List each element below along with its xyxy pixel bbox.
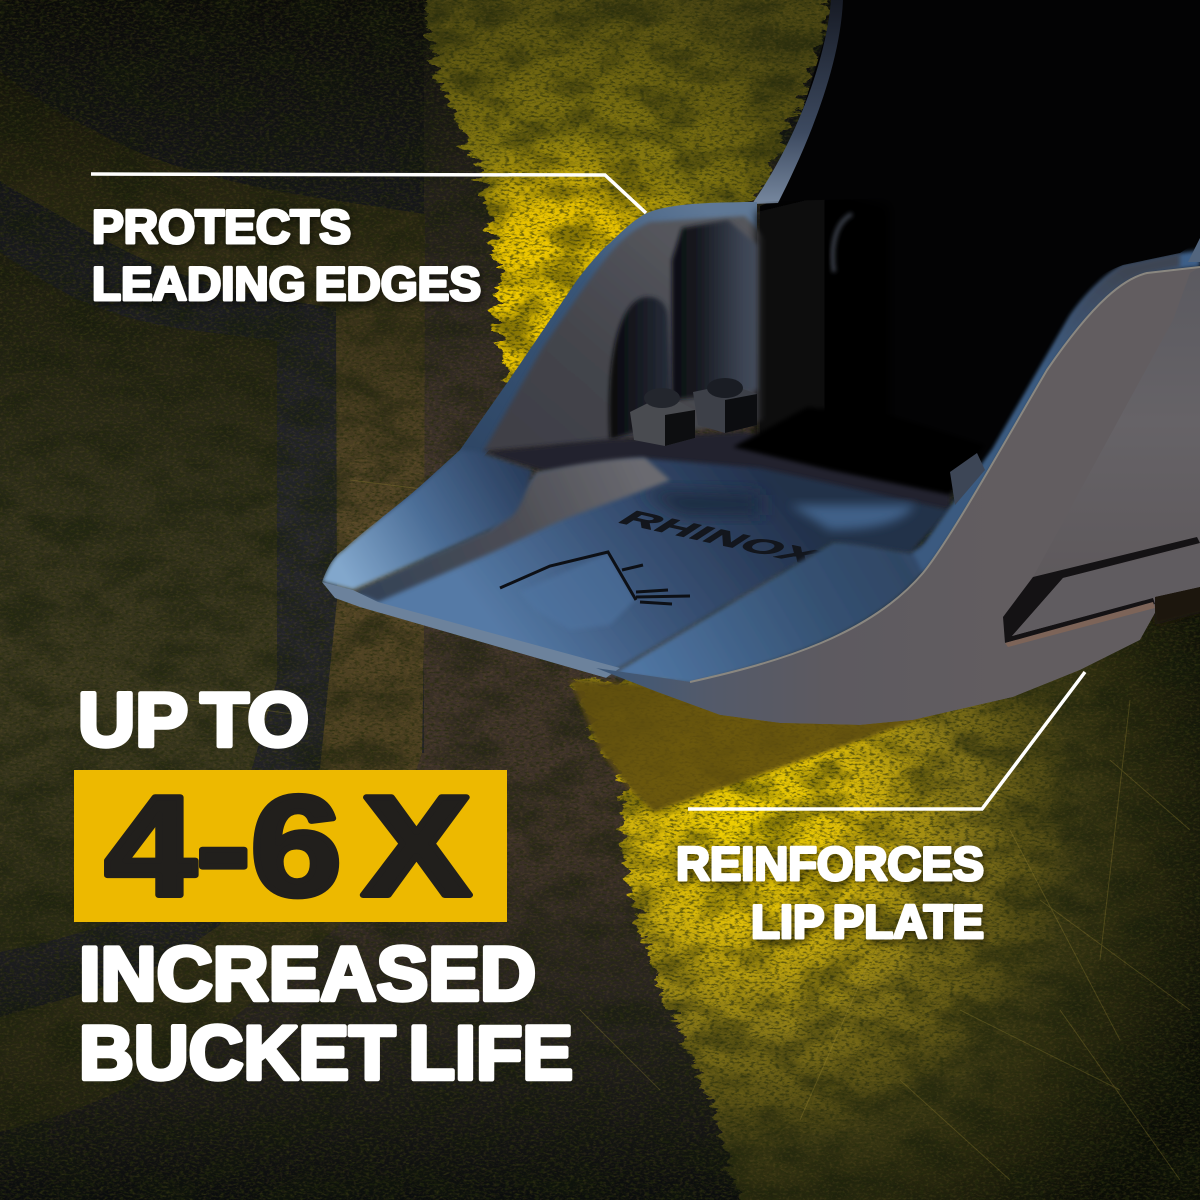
- embossed logo mark: [500, 552, 690, 604]
- grey body right panel: [1033, 267, 1200, 578]
- logo facet: [538, 554, 634, 627]
- body seam highlight: [690, 267, 1200, 682]
- upper wing leading edge: [322, 202, 757, 582]
- nut right: [693, 378, 757, 433]
- background: black upper right: [760, 0, 1200, 500]
- main grey body: [596, 267, 1200, 725]
- dark floor block: [734, 408, 953, 496]
- embossed logo text: RHINOX: [610, 506, 831, 568]
- lower blue panel: [612, 250, 1200, 684]
- floor glow right: [790, 505, 915, 530]
- callout text: reinforces lip plate: [676, 837, 984, 948]
- tooth silhouette: [322, 192, 1200, 725]
- highlight box: 4-6 X: 4-6 X: [105, 767, 471, 926]
- bolt on right: [950, 453, 985, 505]
- callout text: protects leading edges: PROTECTS: [92, 200, 351, 253]
- background: brown brushed area: [0, 0, 780, 1200]
- pillar: [672, 220, 757, 400]
- grey band: [353, 458, 670, 602]
- background: dark strip right of lip: [1150, 578, 1200, 625]
- shaded floor recess: [640, 490, 760, 515]
- slot: [1003, 537, 1200, 647]
- background: olive shield shape: [0, 252, 277, 952]
- callout line: reinforces lip plate: [688, 672, 1085, 809]
- headline: increased bucket life: [79, 932, 573, 1096]
- background: scratches: [190, 480, 1190, 1180]
- callout text: reinforces lip plate: REINFORCES: [676, 837, 984, 890]
- blade: [752, 0, 843, 204]
- tip lobe: [322, 450, 533, 590]
- background: olive arc band: [0, 71, 425, 1132]
- tip lower strip: [322, 582, 620, 680]
- sliver at right edge: [1188, 238, 1200, 262]
- headline: up to: UP TO: [78, 678, 309, 763]
- background: yellow brush top: [425, 0, 836, 400]
- callout text: protects leading edges: LEADING EDGES: [92, 257, 481, 310]
- product: bucket tooth: [322, 0, 1200, 725]
- base ledge: [483, 432, 950, 510]
- callout line: protects leading edges: [91, 174, 646, 213]
- ring highlight: [833, 214, 852, 272]
- headline: increased bucket life: INCREASED: [79, 932, 536, 1017]
- upper strip on right wall: [913, 253, 1180, 573]
- shadow arch: [609, 297, 672, 440]
- dark plate behind pillar: [750, 200, 824, 434]
- background: yellow brush bottom: [572, 580, 1200, 1200]
- background: shadow under tooth: [570, 680, 960, 812]
- wing inner face: [483, 216, 768, 452]
- callout text: protects leading edges: [92, 200, 481, 310]
- callout text: reinforces lip plate: LIP PLATE: [751, 895, 984, 948]
- floor plate: [345, 458, 950, 677]
- nut left: [630, 388, 695, 446]
- headline: increased bucket life: BUCKET LIFE: [79, 1011, 573, 1096]
